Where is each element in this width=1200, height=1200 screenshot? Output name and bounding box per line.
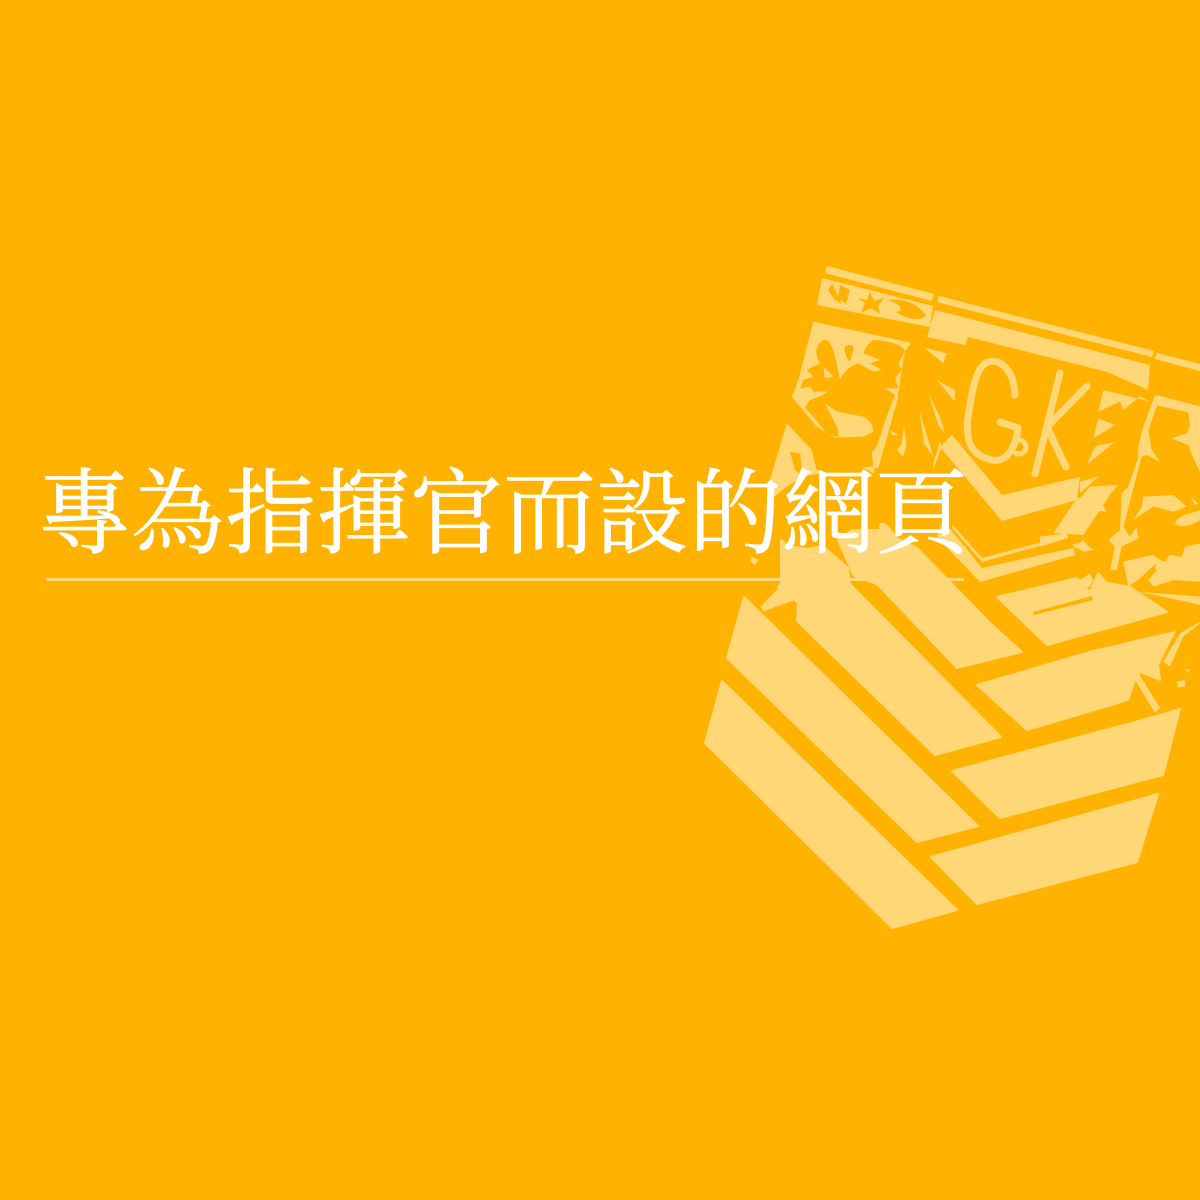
monogram G and K: [967, 361, 1087, 474]
left lion field: [770, 322, 913, 500]
top frieze left: [817, 278, 933, 327]
scroll near title: [879, 523, 900, 563]
top border bars: [825, 266, 1200, 371]
light band above monogram: [927, 310, 1150, 390]
divider rule under title: [46, 578, 964, 581]
right lower lion pieces: [750, 485, 1200, 687]
monogram box: [950, 337, 1107, 495]
orange slit in chevron stripe: [1033, 596, 1093, 615]
monogram base chevron: [940, 435, 1080, 521]
right eagle and lion details: [1040, 390, 1200, 570]
inner wide chevron band: [937, 520, 1075, 582]
title: 專為指揮官而設的網頁: [38, 464, 968, 567]
inner thin chevron: [952, 525, 1068, 562]
lower left field: [770, 423, 820, 500]
chevron stripes: lower crest: [705, 530, 1180, 928]
central eagle wing: [873, 335, 970, 473]
left lion: [800, 340, 905, 455]
orange pill bar at right: [1097, 620, 1200, 648]
